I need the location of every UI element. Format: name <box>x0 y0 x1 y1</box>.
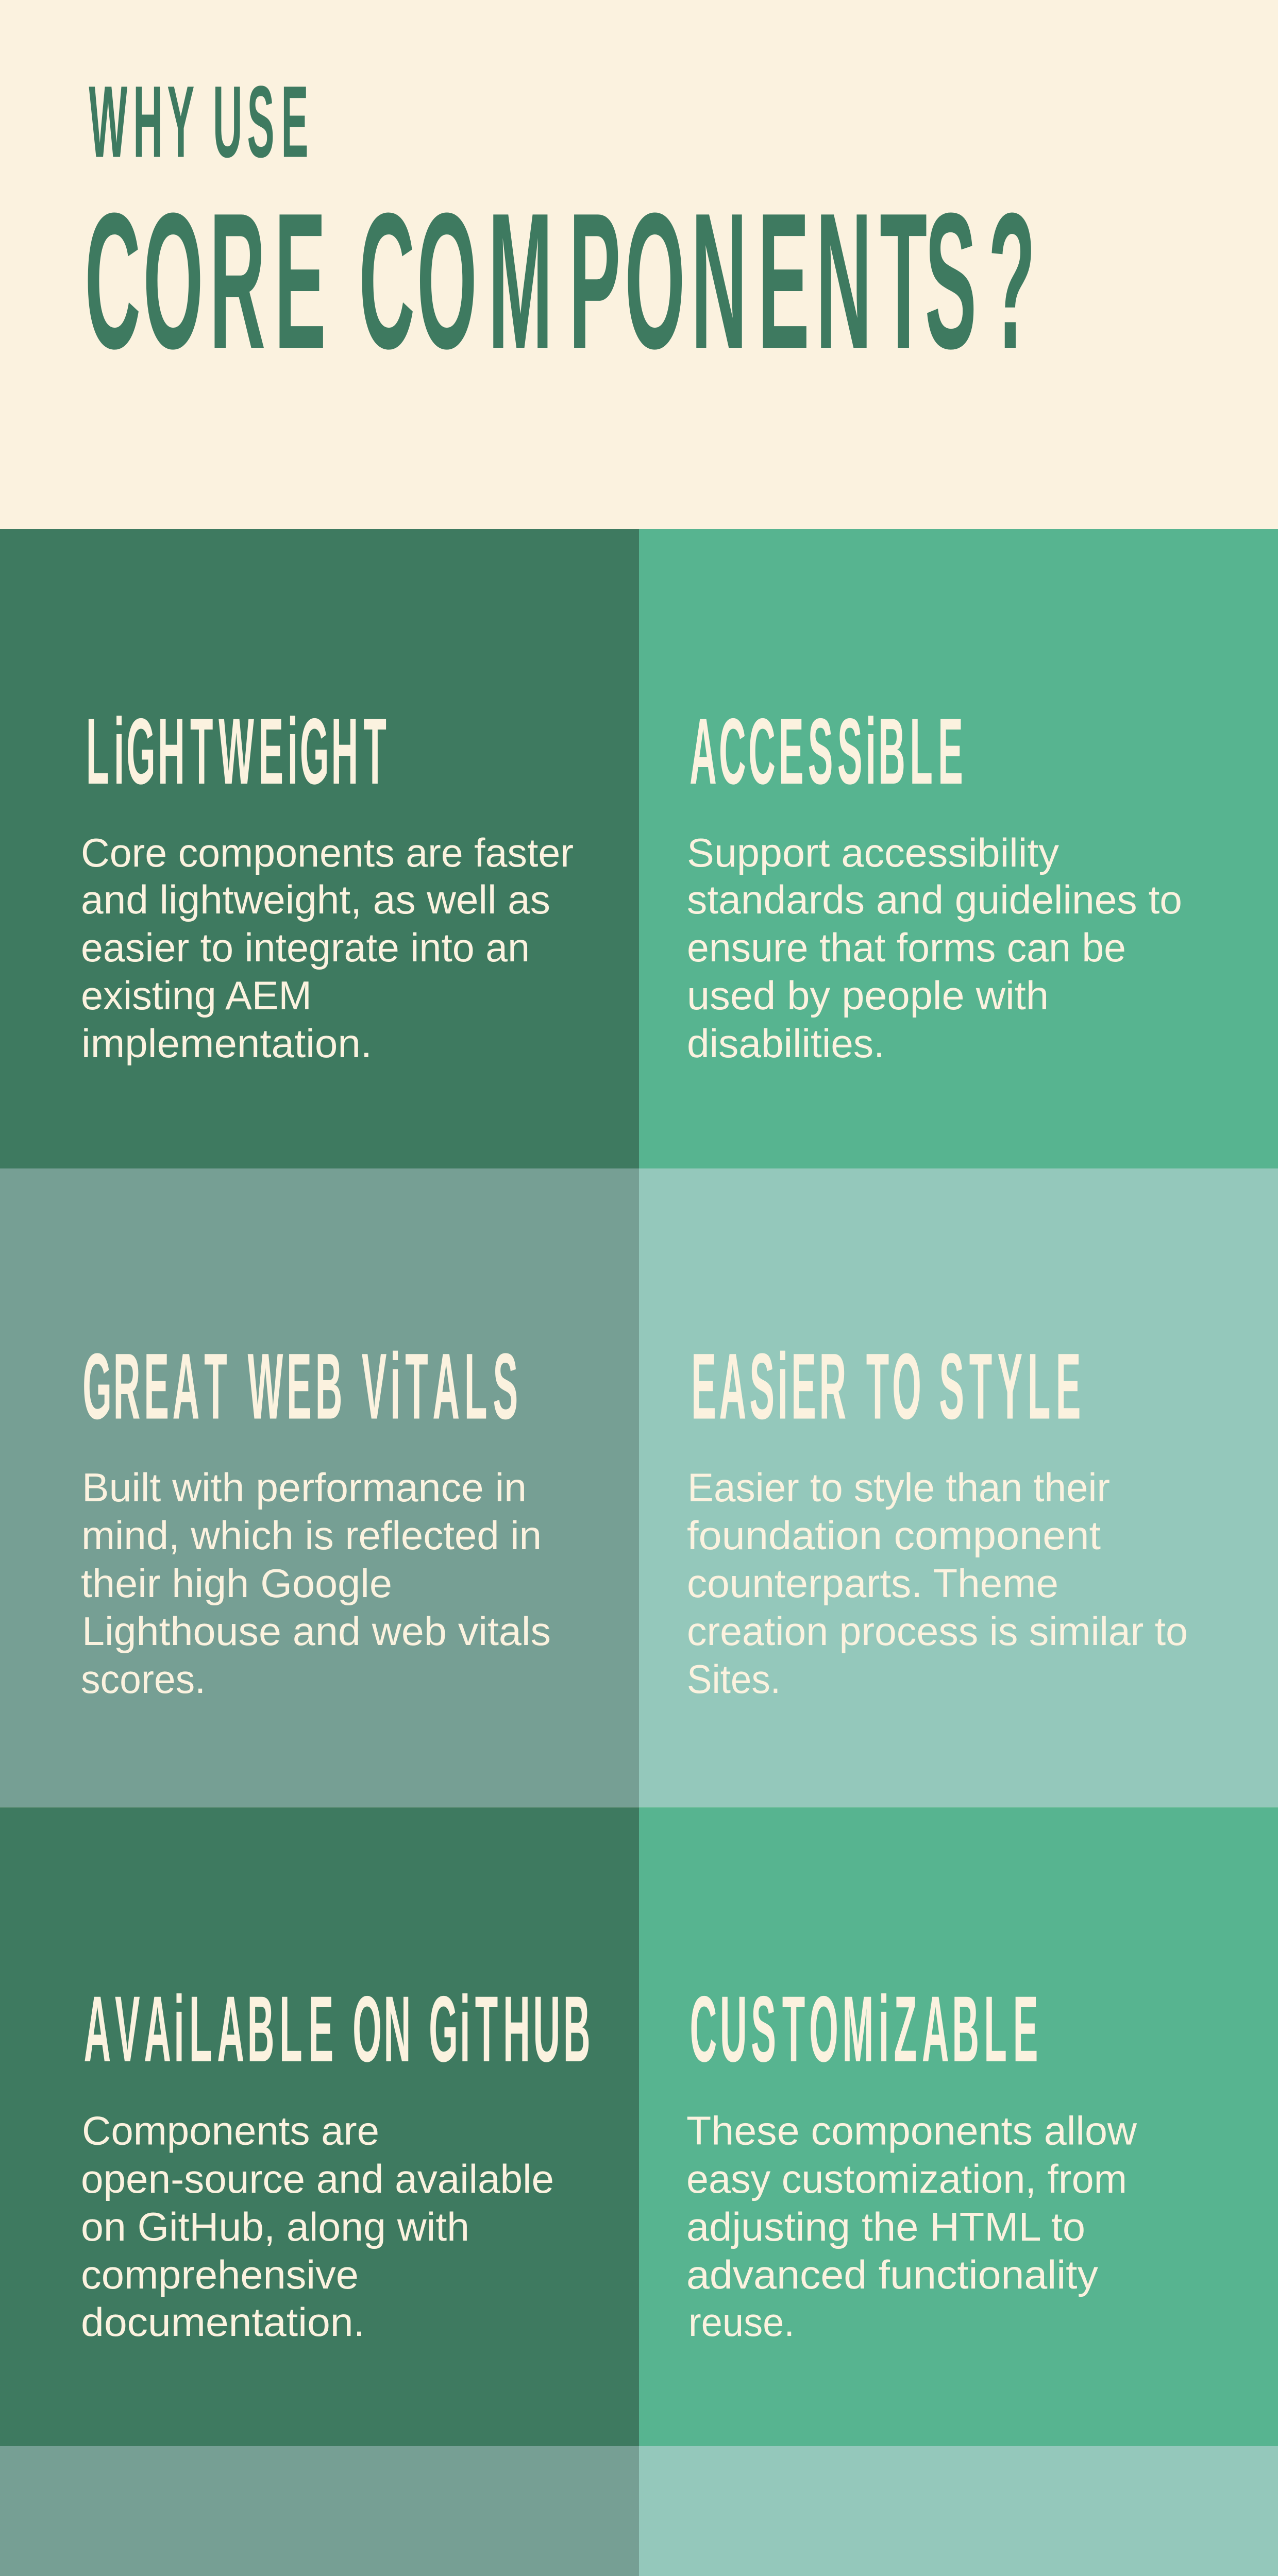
body: lightweight <box>81 830 574 1066</box>
body: great web vitals: Lighthouse and web vitals <box>82 1608 551 1654</box>
body: easier to style <box>687 1465 1188 1702</box>
body: accessible <box>687 830 1182 1066</box>
body: available on github: open-source and available <box>81 2156 554 2201</box>
panel: easier to style <box>639 1168 1278 1807</box>
body: accessible: standards and guidelines to <box>687 877 1182 922</box>
heading: lightweight: LiGHTWEiGHT <box>86 700 386 804</box>
panel: customizable <box>639 1807 1278 2446</box>
body: easier to style: Sites. <box>687 1656 781 1702</box>
body: great web vitals: mind, which is reflected in <box>81 1513 542 1558</box>
body: lightweight: Core components are faster <box>81 830 574 875</box>
body: great web vitals: their high Google <box>81 1561 392 1606</box>
title large line: CORE COMPONENTS? <box>85 173 1035 389</box>
heading: great web vitals: GREAT WEB ViTALS <box>82 1335 518 1439</box>
body: lightweight: existing AEM <box>81 973 312 1018</box>
body: accessible: Support accessibility <box>687 830 1059 875</box>
body: easier to style: Easier to style than their <box>687 1465 1110 1510</box>
body: lightweight: and lightweight, as well as <box>81 877 550 922</box>
body: available on github: documentation. <box>81 2299 365 2345</box>
body: accessible: ensure that forms can be <box>687 925 1126 970</box>
body: great web vitals <box>81 1465 551 1702</box>
body: great web vitals: scores. <box>81 1656 206 1702</box>
header panel <box>0 0 1278 529</box>
body: easier to style: foundation component <box>687 1513 1101 1558</box>
body: great web vitals: Built with performance in <box>82 1465 527 1510</box>
body: lightweight: easier to integrate into an <box>81 925 530 970</box>
body: customizable <box>686 2108 1137 2345</box>
heading: accessible: ACCESSiBLE <box>690 700 963 804</box>
heading: available on github: AVAiLABLE ON GiTHUB <box>84 1977 591 2081</box>
body: customizable: advanced functionality <box>686 2252 1098 2297</box>
panel: no dependency <box>0 2446 639 2576</box>
panel: great web vitals <box>0 1168 639 1807</box>
panel: familiar features <box>639 2446 1278 2576</box>
body: customizable: These components allow <box>686 2108 1137 2154</box>
body: easier to style: counterparts. Theme <box>687 1561 1058 1606</box>
body: available on github <box>81 2108 554 2345</box>
panel: available on github <box>0 1807 639 2446</box>
body: customizable: easy customization, from <box>686 2156 1127 2201</box>
panel: accessible <box>639 529 1278 1168</box>
title small line: WHY USE <box>89 64 308 179</box>
panel: lightweight <box>0 529 639 1168</box>
body: available on github: on GitHub, along with <box>81 2204 469 2249</box>
body: accessible: disabilities. <box>687 1021 885 1066</box>
body: available on github: Components are <box>82 2108 379 2154</box>
heading: customizable: CUSTOMiZABLE <box>690 1977 1038 2081</box>
body: available on github: comprehensive <box>81 2252 359 2297</box>
body: accessible: used by people with <box>687 973 1049 1018</box>
body: customizable: reuse. <box>688 2299 795 2345</box>
heading: easier to style: EASiER TO STYLE <box>691 1335 1081 1439</box>
body: customizable: adjusting the HTML to <box>686 2204 1085 2249</box>
body: lightweight: implementation. <box>81 1021 372 1066</box>
body: easier to style: creation process is similar to <box>687 1608 1188 1654</box>
